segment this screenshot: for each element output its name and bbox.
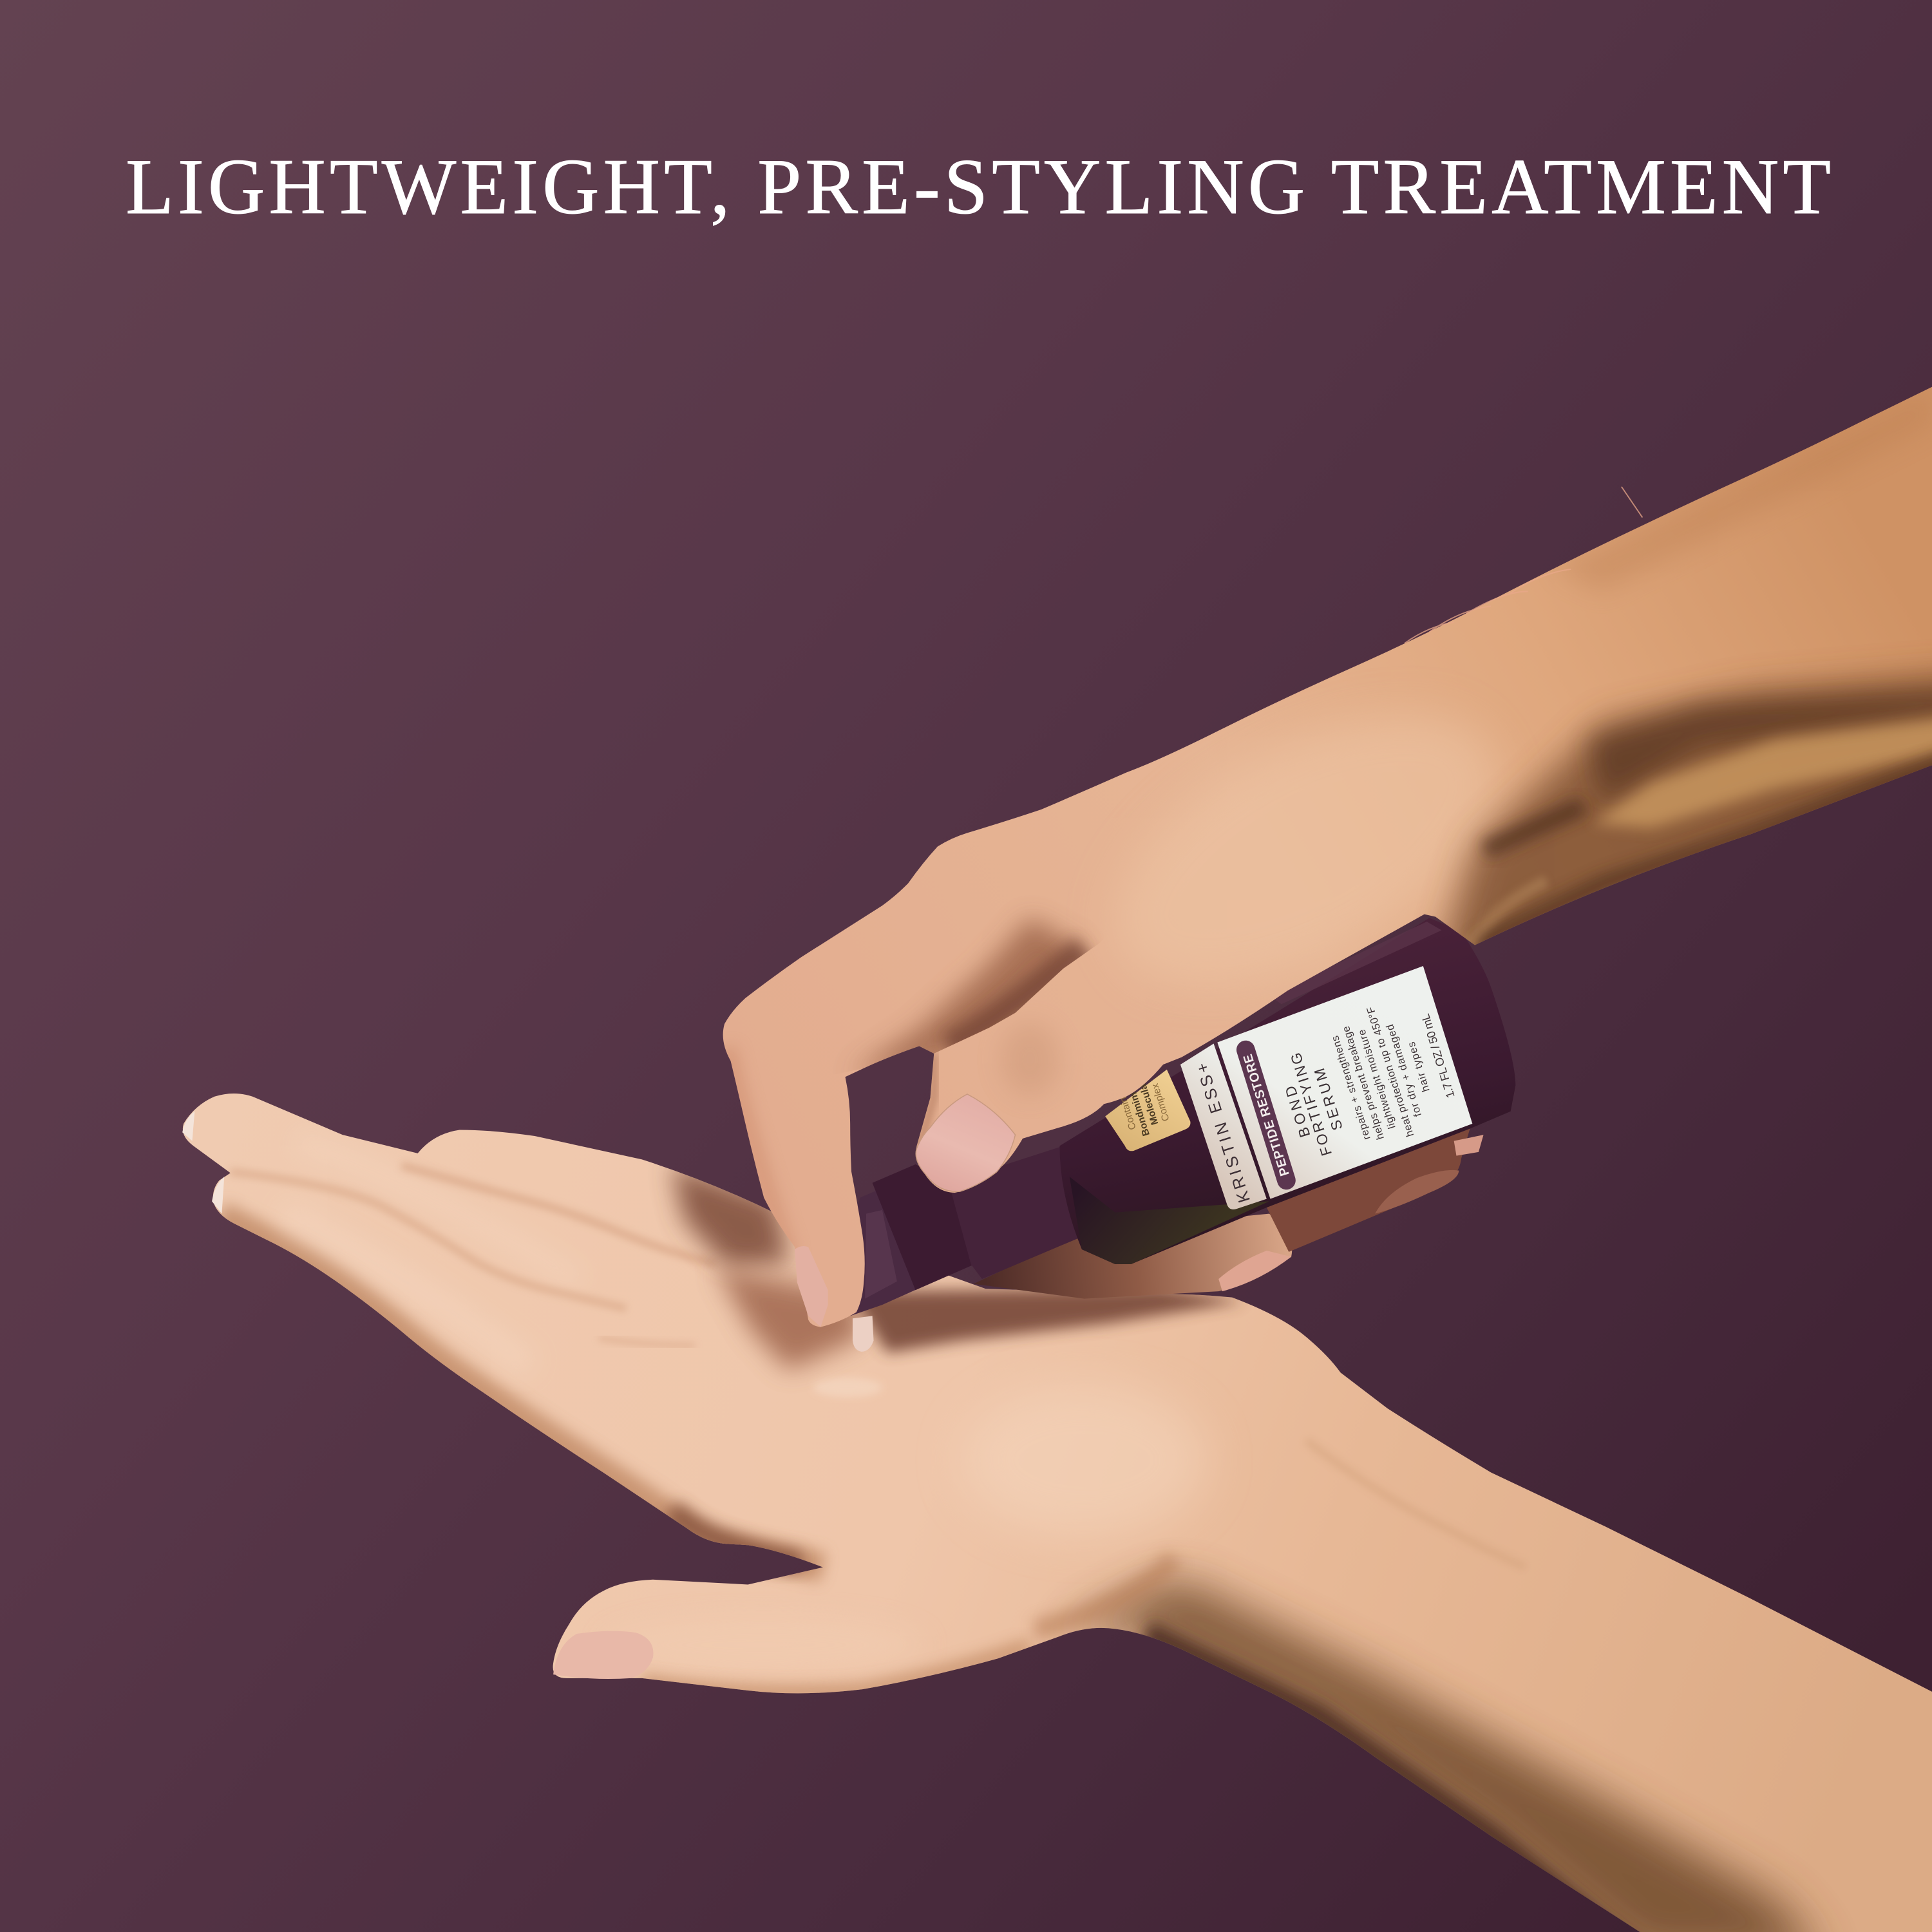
serum drop [813, 1316, 882, 1397]
lower fingers of holding hand [973, 1129, 1484, 1299]
peptide restore pill: PEPTIDE RESTORE [1241, 1052, 1293, 1178]
skin shading on lower hand [220, 1140, 1824, 1932]
brand strip label [1180, 1044, 1267, 1209]
product name: SERUM [1311, 1066, 1346, 1132]
product benefits: for dry + damaged [1384, 1023, 1424, 1118]
open lower hand and forearm [182, 1094, 1932, 1932]
product name: BOND [1282, 1084, 1313, 1139]
gold sticker: Contains [1116, 1090, 1139, 1131]
shadow between index finger and thumb [850, 918, 1084, 1074]
skin shading on holding hand [727, 387, 1932, 1257]
gold sticker [1105, 1070, 1190, 1151]
holding hand and forearm [723, 387, 1932, 1327]
product benefits: hair types [1406, 1040, 1432, 1094]
brand strip label: KRISTIN ESS+ [1193, 1061, 1254, 1205]
product benefits: helps prevent breakage [1340, 1025, 1387, 1141]
index finger nail [795, 1246, 828, 1327]
volume: 1.7 FL OZ / 50 mL [1419, 1012, 1457, 1099]
product benefits: lightweight moisture [1356, 1028, 1398, 1130]
bottle cap [849, 1146, 1078, 1316]
gold sticker: Bondmimic [1126, 1083, 1152, 1137]
gold sticker: Molecular [1137, 1079, 1160, 1126]
product name: FORTIFYING [1287, 1050, 1335, 1158]
product benefits: heat protection up to 450°F [1365, 1005, 1416, 1138]
product bottle [849, 918, 1515, 1316]
title: LIGHTWEIGHT, PRE-STYLING TREATMENT [126, 144, 1831, 231]
product benefits [1329, 1005, 1432, 1141]
bottle body [1059, 918, 1515, 1264]
product benefits: repairs + strengthens [1329, 1034, 1373, 1141]
arm hair highlights [1405, 487, 1642, 643]
main label [1217, 966, 1472, 1199]
thumb nail [916, 1094, 1016, 1191]
nails on lower hand [182, 1112, 653, 1679]
bottle reflection [1070, 1177, 1269, 1264]
gold sticker: Complex [1150, 1082, 1172, 1122]
